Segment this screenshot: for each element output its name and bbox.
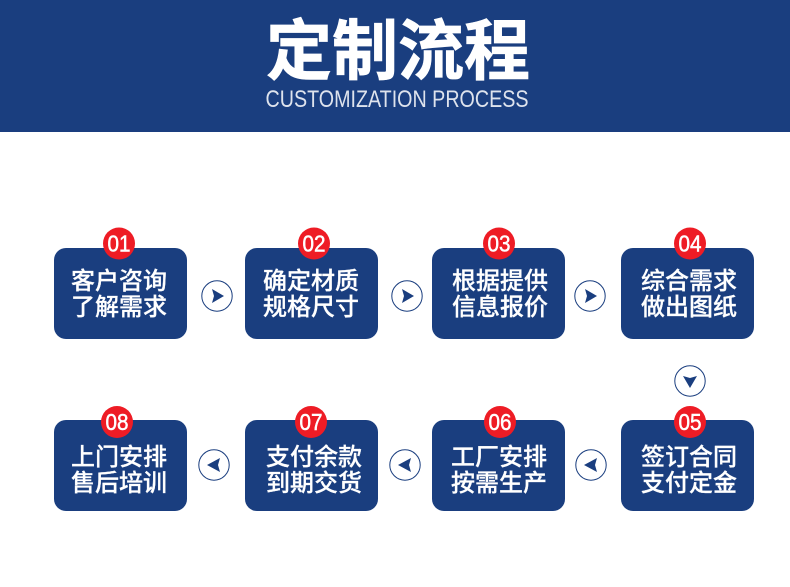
step 01: 01 [108, 230, 130, 256]
step 03 [432, 228, 565, 339]
step 04: 做出图纸 [641, 294, 737, 321]
step 06: 按需生产 [451, 470, 547, 497]
step 03: 03 [488, 230, 510, 256]
step 01: 了解需求 [71, 294, 167, 321]
step 04 [621, 228, 754, 339]
subtitle: CUSTOMIZATION PROCESS [266, 86, 528, 113]
arrow: step 06 to 07 [390, 450, 420, 480]
step 05 [621, 406, 754, 511]
step 07: 到期交货 [266, 470, 362, 497]
step 06: 工厂安排 [451, 444, 547, 471]
step 01 [54, 228, 187, 339]
step 08: 08 [106, 409, 128, 435]
step 07: 07 [300, 409, 322, 435]
title: 定制流程 [266, 14, 530, 88]
step 04: 综合需求 [641, 268, 737, 295]
step 03: 信息报价 [452, 294, 548, 321]
arrow: step 04 to 05 [675, 366, 705, 396]
step 02: 规格尺寸 [263, 294, 359, 321]
step 06: 06 [488, 409, 512, 435]
step 03: 根据提供 [452, 268, 548, 295]
step 07 [245, 406, 378, 511]
arrow: step 02 to 03 [392, 281, 422, 311]
step 05: 签订合同 [641, 444, 737, 471]
step 06 [432, 406, 565, 511]
step 08: 上门安排 [71, 444, 167, 471]
step 08 [54, 406, 187, 511]
step 04: 04 [678, 230, 702, 256]
step 02: 确定材质 [263, 268, 359, 295]
step 05: 05 [678, 409, 702, 435]
arrow: step 01 to 02 [202, 281, 232, 311]
step 07: 支付余款 [266, 444, 362, 471]
step 02: 02 [302, 230, 326, 256]
step 01: 客户咨询 [71, 268, 167, 295]
step 02 [245, 228, 378, 339]
arrow: step 05 to 06 [576, 450, 606, 480]
step 08: 售后培训 [71, 470, 167, 497]
arrow: step 03 to 04 [575, 281, 605, 311]
header banner [0, 0, 790, 132]
arrow: step 07 to 08 [199, 450, 229, 480]
step 05: 支付定金 [641, 470, 737, 497]
